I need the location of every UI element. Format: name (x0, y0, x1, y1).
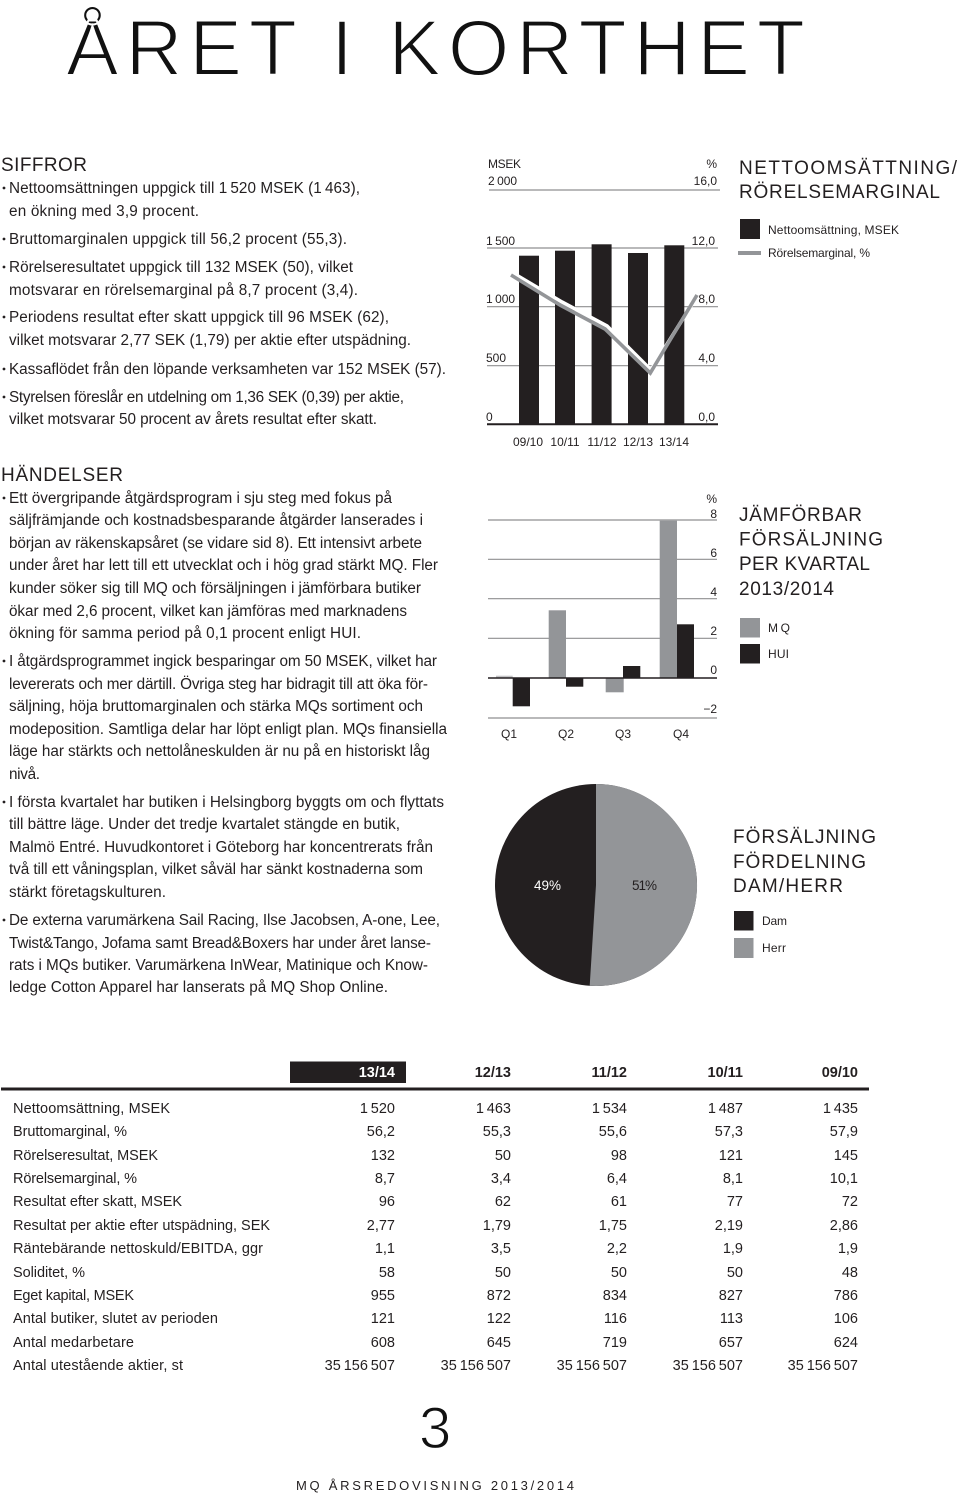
column 10/11: 121 (719, 1148, 743, 1164)
column 09/10: 72 (842, 1194, 858, 1210)
axis labels: MSEK (488, 157, 521, 171)
column 09/10: 786 (834, 1288, 858, 1304)
legend: MQ och HUI: MQ (768, 621, 790, 635)
table row labels: Resultat efter skatt, MSEK (13, 1194, 182, 1210)
column 10/11: 57,3 (715, 1124, 743, 1140)
axis labels: 2 (710, 624, 717, 638)
column 12/13: 35 156 507 (441, 1358, 511, 1374)
column 13/14: 35 156 507 (325, 1358, 395, 1374)
bars: HUI (513, 624, 694, 706)
column 10/11 (673, 1101, 743, 1374)
column 12/13: 50 (495, 1148, 511, 1164)
table row labels: Antal utestående aktier, st (13, 1358, 183, 1374)
text block: händelser bullets: nivå. (9, 766, 40, 783)
axis labels: 4 (710, 585, 717, 599)
column 12/13: 645 (487, 1335, 511, 1351)
column 10/11: 113 (720, 1311, 743, 1327)
table header: 12/13 (475, 1065, 511, 1081)
column 11/12: 35 156 507 (557, 1358, 627, 1374)
axis labels: 1 000 (486, 292, 515, 306)
column 11/12: 116 (604, 1311, 627, 1327)
text block: siffror bullets: Bruttomarginalen uppgick till 56,2 procent (55,3). (9, 231, 347, 248)
heading: jämförbar försäljning: FÖRSÄLJNING (739, 530, 883, 551)
column 13/14: 121 (371, 1311, 395, 1327)
chart: jämförbar försäljning per kvartal (488, 492, 717, 741)
axis labels: 4,0 (698, 351, 715, 365)
line: rörelsemarginal (511, 273, 699, 373)
axis labels: Q3 (615, 727, 631, 741)
text block: siffror bullets: motsvarar en rörelsemarginal på 8,7 procent (3,4). (9, 282, 358, 299)
text block: siffror bullets: Kassaflödet från den löpande verksamheten var 152 MSEK (57). (9, 361, 446, 378)
text block: händelser bullets (3, 490, 447, 996)
column 11/12: 61 (611, 1194, 627, 1210)
axis labels: Q1 (501, 727, 517, 741)
column 09/10: 35 156 507 (788, 1358, 858, 1374)
column 12/13: 50 (495, 1265, 511, 1281)
axis labels: Q2 (558, 727, 574, 741)
text block: händelser bullets: modeposition. Samtliga delar har löpt enligt plan. MQs finansiella (9, 721, 447, 738)
table header (1, 1062, 869, 1090)
text block: siffror bullets: en ökning med 3,9 procent. (9, 203, 199, 220)
text block: händelser bullets: rats i MQs butiker. Varumärkena InWear, Matinique och Know- (9, 957, 428, 974)
text block: händelser bullets: början av räkenskapsåret (se vidare sid 8). Ett intensivt arbete (9, 535, 422, 552)
text block: händelser bullets: ökning för samma period på 0,1 procent enligt HUI. (9, 625, 361, 642)
text block: siffror bullets: Periodens resultat efter skatt uppgick till 96 MSEK (62), (9, 309, 389, 326)
heading: försäljning fördelning: DAM/HERR (733, 876, 843, 897)
column 10/11: 1 487 (708, 1101, 743, 1117)
heading: nettoomsättning/rörelsemarginal: NETTOOMSÄTTNING/ (739, 158, 958, 179)
text block: siffror bullets: vilket motsvarar 50 procent av årets resultat efter skatt. (9, 411, 377, 428)
bars: MQ (496, 521, 677, 692)
column 09/10: 624 (834, 1335, 858, 1351)
heading: jämförbar försäljning (739, 505, 883, 600)
legend: MQ och HUI: HUI (768, 647, 789, 661)
column 11/12: 98 (611, 1148, 627, 1164)
text block: händelser bullets: till bättre läge. Under det tredje kvartalet stängde en butik, (9, 816, 400, 833)
heading: nettoomsättning/rörelsemarginal: RÖRELSEMARGINAL (739, 182, 940, 203)
table header: 09/10 (822, 1065, 858, 1081)
text block: händelser bullets: Twist&Tango, Jofama samt Bread&Boxers har under året lanse- (9, 935, 431, 952)
axis labels: % (706, 492, 717, 506)
chart: nettoomsättning och rörelsemarginal (486, 157, 720, 449)
column 10/11: 35 156 507 (673, 1358, 743, 1374)
axis labels (486, 157, 717, 449)
title: ÅRET I KORTHET (66, 3, 805, 92)
column 12/13: 55,3 (483, 1124, 511, 1140)
column 13/14 (325, 1101, 395, 1374)
column 10/11: 1,9 (723, 1241, 743, 1257)
table row labels: Bruttomarginal, % (13, 1124, 127, 1140)
axis labels: −2 (703, 702, 717, 716)
column 09/10 (788, 1101, 858, 1374)
axis labels (501, 492, 717, 741)
axis labels: 12,0 (692, 234, 715, 248)
table row labels: Räntebärande nettoskuld/EBITDA, ggr (13, 1241, 263, 1257)
axis labels: 11/12 (587, 435, 617, 449)
axis labels: 0 (710, 663, 717, 677)
bars: nettoomsättning (519, 244, 684, 424)
text block: händelser bullets: kunder söker sig till MQ och försäljningen i jämförbara butiker (9, 580, 421, 597)
text block: händelser bullets: stärkt företagskulturen. (9, 884, 166, 901)
chart: försäljning dam/herr: 49% (534, 878, 561, 893)
axis labels: 13/14 (659, 435, 689, 449)
text block: siffror bullets: Styrelsen föreslår en utdelning om 1,36 SEK (0,39) per aktie, (9, 389, 404, 406)
text block: händelser bullets: under året har lett till ett utvecklat och i hög grad stärkt MQ. Fler (9, 557, 438, 574)
column 10/11: 8,1 (723, 1171, 743, 1187)
table row labels: Antal butiker, slutet av perioden (13, 1311, 218, 1327)
table row labels: Rörelsemarginal, % (13, 1171, 137, 1187)
column 10/11: 77 (727, 1194, 743, 1210)
legend: dam och herr: Dam (762, 914, 787, 928)
axis labels: 16,0 (694, 174, 717, 188)
axis labels: 2 000 (488, 174, 517, 188)
table row labels: Rörelseresultat, MSEK (13, 1148, 158, 1164)
column 13/14: 2,77 (367, 1218, 395, 1234)
column 09/10: 10,1 (830, 1171, 858, 1187)
table header: 10/11 (708, 1065, 743, 1081)
axis labels: 09/10 (513, 435, 543, 449)
column 09/10: 145 (834, 1148, 858, 1164)
column 09/10: 106 (834, 1311, 858, 1327)
column 13/14: 608 (371, 1335, 395, 1351)
column 13/14: 96 (379, 1194, 395, 1210)
text block: händelser bullets: läge har stärkts och nettolåneskulden är nu på en historiskt låg (9, 743, 430, 760)
axis labels: Q4 (673, 727, 689, 741)
column 11/12: 834 (603, 1288, 627, 1304)
heading: siffror: SIFFROR (1, 155, 87, 176)
column 12/13 (441, 1101, 511, 1374)
axis labels: 10/11 (550, 435, 580, 449)
text block: händelser bullets: ledge Cotton Apparel har lanserats på MQ Shop Online. (9, 979, 388, 996)
text block: händelser bullets: I första kvartalet har butiken i Helsingborg byggts om och flyttats (9, 794, 444, 811)
table row labels: Eget kapital, MSEK (13, 1288, 134, 1304)
text block: händelser bullets: I åtgärdsprogrammet ingick besparingar om 50 MSEK, vilket har (9, 653, 437, 670)
table row labels: Soliditet, % (13, 1265, 85, 1281)
panel: händelser (1, 465, 447, 996)
text block: siffror bullets: Rörelseresultatet uppgick till 132 MSEK (50), vilket (9, 259, 354, 276)
column 11/12: 6,4 (607, 1171, 627, 1187)
column 11/12: 1,75 (599, 1218, 627, 1234)
text block: siffror bullets: vilket motsvarar 2,77 SEK (1,79) per aktie efter utspädning. (9, 332, 411, 349)
panel: siffror (1, 155, 446, 428)
text block: händelser bullets: De externa varumärkena Sail Racing, Ilse Jacobsen, A-one, Lee, (9, 912, 440, 929)
table row labels: Antal medarbetare (13, 1335, 134, 1351)
axis labels: 500 (486, 351, 506, 365)
axis labels: 1 500 (486, 234, 515, 248)
table header: 13/14 (359, 1065, 395, 1081)
column 11/12: 719 (603, 1335, 627, 1351)
footer: MQ ÅRSREDOVISNING 2013/2014 (296, 1478, 574, 1493)
text block: händelser bullets: levererats och mer därtill. Övriga steg har bidragit till att öka för- (9, 675, 428, 693)
column 09/10: 1,9 (838, 1241, 858, 1257)
column 12/13: 62 (495, 1194, 511, 1210)
column 12/13: 1 463 (476, 1101, 511, 1117)
column 10/11: 827 (719, 1288, 743, 1304)
table row labels: Nettoomsättning, MSEK (13, 1101, 170, 1117)
column 11/12: 50 (611, 1265, 627, 1281)
chart: försäljning dam/herr (495, 784, 697, 986)
legend: MQ och HUI (740, 618, 790, 664)
legend: dam och herr (734, 911, 787, 958)
column 10/11: 50 (727, 1265, 743, 1281)
column 09/10: 1 435 (823, 1101, 858, 1117)
page number: 3 (419, 1396, 451, 1461)
column 13/14: 955 (371, 1288, 395, 1304)
column 13/14: 56,2 (367, 1124, 395, 1140)
heading: nettoomsättning/rörelsemarginal (739, 158, 958, 203)
chart: försäljning dam/herr: 51% (632, 878, 657, 893)
table: nyckeltal (1, 1062, 869, 1374)
table row labels: Resultat per aktie efter utspädning, SEK (13, 1218, 270, 1234)
heading: jämförbar försäljning: JÄMFÖRBAR (739, 505, 862, 526)
text block: siffror bullets (3, 180, 446, 428)
column 13/14: 132 (371, 1148, 395, 1164)
text block: händelser bullets: Malmö Entré. Huvudkontoret i Göteborg har koncentrerats från (9, 839, 433, 856)
legend: nettoomsättning/rörelsemarginal: Rörelsemarginal, % (768, 246, 870, 260)
legend: nettoomsättning/rörelsemarginal (738, 219, 899, 260)
legend: nettoomsättning/rörelsemarginal: Nettoomsättning, MSEK (768, 223, 899, 237)
axis labels: 8,0 (698, 292, 715, 306)
axis labels: 6 (710, 546, 717, 560)
column 12/13: 3,4 (491, 1171, 511, 1187)
text block: händelser bullets: Ett övergripande åtgärdsprogram i sju steg med fokus på (9, 490, 392, 507)
column 12/13: 122 (487, 1311, 511, 1327)
column 09/10: 2,86 (830, 1218, 858, 1234)
heading: försäljning fördelning: FÖRSÄLJNING (733, 827, 876, 848)
column 12/13: 872 (487, 1288, 511, 1304)
heading: händelser: HÄNDELSER (1, 465, 123, 486)
text block: siffror bullets: Nettoomsättningen uppgick till 1 520 MSEK (1 463), (9, 180, 360, 197)
heading: jämförbar försäljning: PER KVARTAL (739, 554, 870, 575)
axis labels: 12/13 (623, 435, 653, 449)
column 09/10: 48 (842, 1265, 858, 1281)
axis labels: 8 (710, 507, 717, 521)
column 13/14: 1 520 (360, 1101, 395, 1117)
column 11/12 (557, 1101, 627, 1374)
text block: händelser bullets: ökar med 2,6 procent, vilket kan jämföras med marknadens (9, 603, 407, 620)
heading: försäljning fördelning: FÖRDELNING (733, 852, 866, 873)
column 12/13: 1,79 (483, 1218, 511, 1234)
heading: jämförbar försäljning: 2013/2014 (739, 579, 834, 600)
column 09/10: 57,9 (830, 1124, 858, 1140)
axis labels: 0,0 (698, 410, 715, 424)
table header: 11/12 (592, 1065, 627, 1081)
column 10/11: 657 (719, 1335, 743, 1351)
text block: händelser bullets: säljfrämjande och kostnadsbesparande åtgärder lanserades i (9, 512, 423, 529)
column 13/14: 1,1 (375, 1241, 395, 1257)
legend: dam och herr: Herr (762, 941, 786, 955)
heading: försäljning fördelning (733, 827, 876, 897)
column 11/12: 2,2 (607, 1241, 627, 1257)
column 10/11: 2,19 (715, 1218, 743, 1234)
column 11/12: 1 534 (592, 1101, 627, 1117)
column 13/14: 8,7 (375, 1171, 395, 1187)
axis labels: 0 (486, 410, 493, 424)
table row labels (13, 1101, 270, 1374)
column 11/12: 55,6 (599, 1124, 627, 1140)
axis labels: % (706, 157, 717, 171)
text block: händelser bullets: två till ett våningsplan, vilket såväl har sänkt kostnaderna som (9, 861, 423, 878)
column 12/13: 3,5 (491, 1241, 511, 1257)
column 13/14: 58 (379, 1265, 395, 1281)
text block: händelser bullets: säljning, höja bruttomarginalen och stärka MQs sortiment och (9, 698, 423, 715)
